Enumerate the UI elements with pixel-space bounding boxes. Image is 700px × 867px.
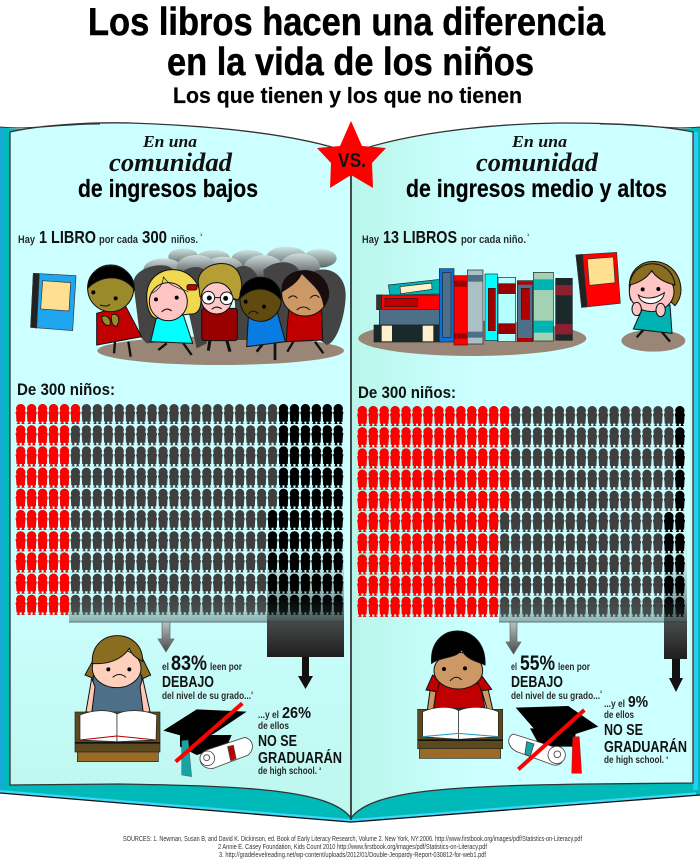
- left stat: graduation: de high school.: [258, 765, 317, 777]
- diploma: [200, 737, 252, 768]
- left book ratio text: por cada: [99, 234, 139, 246]
- sources: 3. http://gradelevelreading.net/wp-content/uploads/2012/01/Double-Jeopardy-Report-030812-for-web1.pdf: [219, 852, 486, 859]
- boy at desk: [426, 631, 493, 710]
- left heading: En una: [142, 132, 198, 151]
- left book ratio text: 1: [200, 232, 203, 237]
- left stat: reading: DEBAJO: [162, 674, 214, 691]
- left heading: comunidad: [109, 148, 233, 177]
- right heading: [406, 132, 667, 203]
- vs star: VS.: [338, 150, 366, 172]
- left bracket and arrows: [69, 510, 344, 689]
- left book ratio text: [18, 227, 203, 247]
- right book ratio text: [362, 227, 530, 247]
- right stat: graduation: ...y el: [604, 698, 625, 710]
- right stat: reading: 55%: [520, 652, 555, 675]
- right stat: reading: DEBAJO: [511, 674, 563, 691]
- graduation cap: [163, 709, 247, 777]
- child 4: [240, 277, 285, 360]
- right stat: reading: leen por: [558, 661, 590, 673]
- right book ratio text: Hay: [362, 234, 379, 246]
- right section label: De 300 niños:: [358, 383, 456, 402]
- left book ratio text: niños.: [171, 234, 198, 246]
- right stat: graduation: [604, 694, 687, 766]
- illustration: boy reading and crossed-out graduation: [418, 631, 598, 773]
- right book ratio text: 1: [527, 232, 530, 237]
- crossed-out line: [176, 703, 242, 762]
- pictogram: left 300 children: [16, 404, 343, 615]
- desk and open book: [418, 707, 503, 758]
- icon: single book: [31, 273, 76, 331]
- left book ratio text: 300: [142, 227, 167, 247]
- right stat: graduation: de ellos: [604, 709, 634, 721]
- vs star: [317, 121, 386, 188]
- pictogram: right 300 children: [357, 406, 685, 617]
- diploma: [509, 734, 565, 765]
- left stat: graduation: 3: [319, 766, 322, 771]
- illustration: books and happy child: [358, 252, 685, 356]
- left stat: reading: 83%: [171, 652, 207, 675]
- sources: [123, 836, 582, 859]
- sources: SOURCES: 1. Newman, Susan B, and David K. Dickinson, ed. Book of Early Literacy Research, Volume 2. New York, NY:2006. http://www.firstbook.org/images/pdf/Statistics-on-Literacy.pdf: [123, 836, 582, 843]
- title: [88, 1, 605, 84]
- left stat: reading: del nivel de su grado...: [162, 690, 251, 702]
- title: Los libros hacen una diferencia: [88, 1, 605, 44]
- right page: [351, 123, 693, 818]
- right book ratio text: por cada niño.: [461, 234, 526, 246]
- title: en la vida de los niños: [167, 41, 534, 84]
- right stat: graduation: de high school.: [604, 754, 664, 766]
- right bracket and arrows: [499, 510, 687, 692]
- right stat: reading: del nivel de su grado...: [511, 690, 600, 702]
- child 2: [147, 270, 201, 355]
- right book ratio text: 13 LIBROS: [383, 227, 457, 247]
- right stat: reading: 2: [600, 689, 603, 694]
- left stat: graduation: GRADUARÁN: [258, 750, 342, 767]
- left stat: reading: el: [162, 661, 169, 673]
- crossed-out line: [518, 710, 584, 769]
- left stat: reading: leen por: [210, 661, 242, 673]
- left stat: graduation: ...y el: [258, 709, 279, 721]
- right stat: reading: [511, 652, 603, 702]
- left stat: reading: 2: [251, 690, 254, 695]
- illustration: girl reading and crossed-out graduation: [75, 636, 252, 777]
- left stat: reading: [162, 652, 254, 702]
- right stat: graduation: 9%: [628, 694, 648, 711]
- right stat: graduation: NO SE: [604, 722, 643, 739]
- shelf shadow: [358, 321, 586, 356]
- illustration: one book and sad children: [31, 247, 346, 365]
- girl at desk: [85, 636, 151, 713]
- crowd shadow: [97, 336, 344, 365]
- left heading: de ingresos bajos: [78, 175, 258, 203]
- right stat: graduation: 3: [666, 755, 669, 760]
- left section label: De 300 niños:: [17, 380, 115, 399]
- right heading: En una: [511, 132, 568, 151]
- left page: [10, 123, 351, 818]
- child 3: [198, 264, 242, 352]
- left heading: [78, 132, 258, 203]
- happy child: [621, 261, 685, 352]
- graduation cap: [516, 706, 598, 773]
- child 5: [282, 271, 329, 353]
- left stat: graduation: NO SE: [258, 733, 297, 750]
- icon: flying book: [576, 252, 620, 307]
- right stat: reading: el: [511, 661, 517, 673]
- left book ratio text: 1 LIBRO: [39, 227, 96, 247]
- left book ratio text: Hay: [18, 234, 35, 246]
- child 1: [88, 265, 142, 357]
- left stat: graduation: 26%: [282, 705, 311, 722]
- left stat: graduation: [258, 705, 342, 777]
- desk and open book: [75, 711, 160, 762]
- subtitle: Los que tienen y los que no tienen: [173, 83, 522, 108]
- upright books: [439, 269, 572, 345]
- right heading: comunidad: [476, 148, 599, 177]
- left stat: graduation: de ellos: [258, 720, 289, 732]
- stacked books: [374, 279, 441, 342]
- grey crowd: [143, 247, 337, 282]
- sources: 2 Annie E. Casey Foundation, Kids Count 2010 http://www.firstbook.org/images/pdf/Statistics-on-Literacy.pdf: [218, 844, 487, 851]
